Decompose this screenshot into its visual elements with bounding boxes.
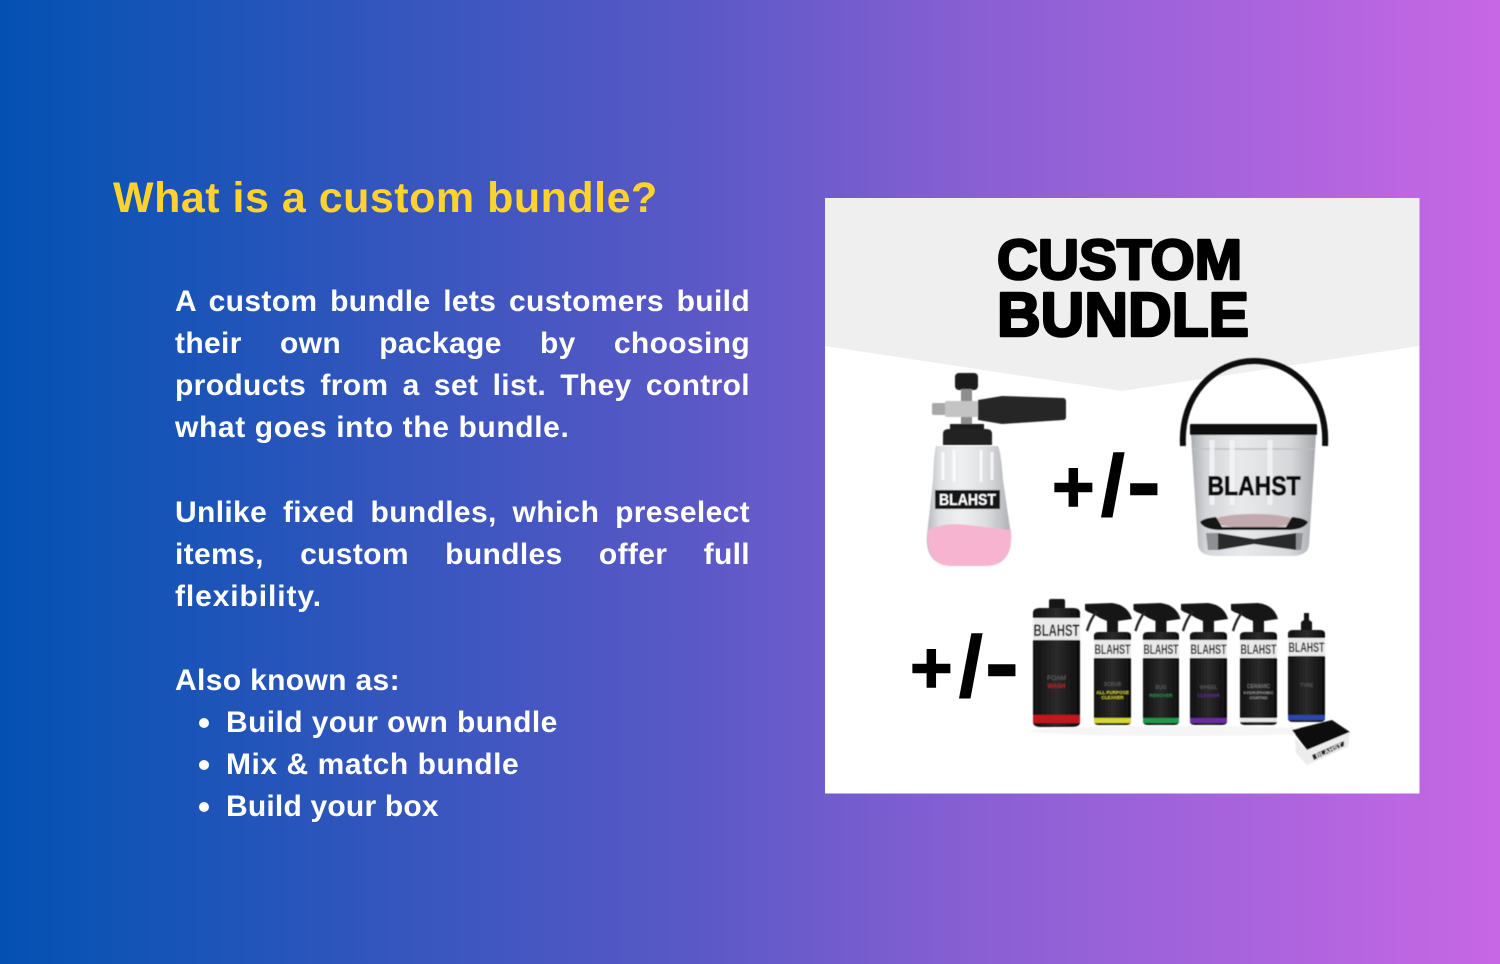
grey header banner [825, 198, 1420, 391]
product: wheel cleaner: BLAHST [1190, 641, 1227, 657]
text block: definition [174, 285, 750, 444]
product: tyre dressing: TYRE [1300, 683, 1314, 689]
plus minus symbol one: / [1101, 439, 1125, 534]
plus minus symbol two [910, 614, 1019, 715]
product: all purpose cleaner [1085, 603, 1132, 725]
product: wheel cleaner [1181, 603, 1228, 725]
plus minus symbol one [1052, 433, 1161, 534]
panel: custom bundle image [825, 198, 1420, 794]
product: ceramic hydrophobic coating: HYDROPHOBIC [1244, 690, 1274, 695]
product: tyre dressing [1288, 613, 1325, 722]
text block: definition: what goes into the bundle. [175, 411, 569, 444]
text block: also known as list: Also known as: [175, 664, 400, 697]
product: tyre dressing: BLAHST [1288, 639, 1325, 655]
text block: also known as list [175, 664, 558, 823]
product: foam wash bottle: WASH [1048, 684, 1066, 690]
plus minus symbol two: / [959, 620, 983, 715]
product: bug remover: REMOVER [1149, 693, 1173, 698]
product: bug remover: BLAHST [1144, 641, 1179, 657]
text block: comparison with fixed bundles: Unlike fixed bundles, which preselect [175, 496, 750, 529]
text block: definition: their own package by choosing [175, 327, 750, 360]
text block: also known as list: Mix & match bundle [226, 748, 519, 781]
title: What is a custom bundle? [113, 174, 658, 222]
plus minus symbol two: - [985, 614, 1019, 712]
icon: foam cannon bottle [927, 373, 1066, 566]
product: bug remover [1134, 603, 1180, 725]
heading: custom bundle [997, 228, 1249, 350]
plus minus symbol two: + [910, 628, 953, 709]
text block: comparison with fixed bundles [175, 496, 750, 613]
product: applicator sponge [1292, 720, 1350, 765]
product: all purpose cleaner: BLAHST [1094, 641, 1131, 657]
product row [1030, 599, 1350, 765]
heading: custom bundle: BUNDLE [997, 281, 1249, 350]
text block: also known as list: Build your box [226, 790, 439, 823]
product: all purpose cleaner: SCRUB [1104, 682, 1122, 688]
product: wheel cleaner: WHEEL [1200, 685, 1218, 691]
text block: definition: products from a set list. They control [175, 369, 750, 402]
bucket label: BLAHST [1208, 471, 1301, 501]
plus minus symbol one: + [1052, 447, 1095, 528]
text block: comparison with fixed bundles: items, custom bundles offer full [175, 538, 750, 571]
text block: also known as list: Build your own bundle [226, 706, 558, 739]
product: applicator sponge: BLAHST [1315, 742, 1344, 760]
product: foam wash bottle: BLAHST [1034, 621, 1080, 640]
icon: wash bucket [1183, 361, 1325, 556]
product: ceramic hydrophobic coating [1231, 603, 1278, 725]
plus minus symbol one: - [1127, 433, 1161, 531]
product: ceramic hydrophobic coating: COATING [1250, 695, 1267, 700]
product: ceramic hydrophobic coating: CERAMIC [1247, 684, 1270, 690]
bottle label: BLAHST [939, 492, 996, 509]
product: foam wash bottle: FOAM [1047, 675, 1066, 682]
product: ceramic hydrophobic coating: BLAHST [1240, 641, 1277, 657]
product: wheel cleaner: CLEANER [1197, 693, 1220, 698]
product: all purpose cleaner: CLEANER [1101, 695, 1124, 700]
product: all purpose cleaner: ALL PURPOSE [1096, 690, 1129, 695]
text block: comparison with fixed bundles: flexibility. [175, 580, 322, 613]
product: foam wash bottle [1033, 599, 1080, 727]
product: bug remover: BUG [1156, 685, 1167, 691]
heading: custom bundle: CUSTOM [997, 228, 1242, 292]
text block: definition: A custom bundle lets customers build [175, 285, 750, 318]
